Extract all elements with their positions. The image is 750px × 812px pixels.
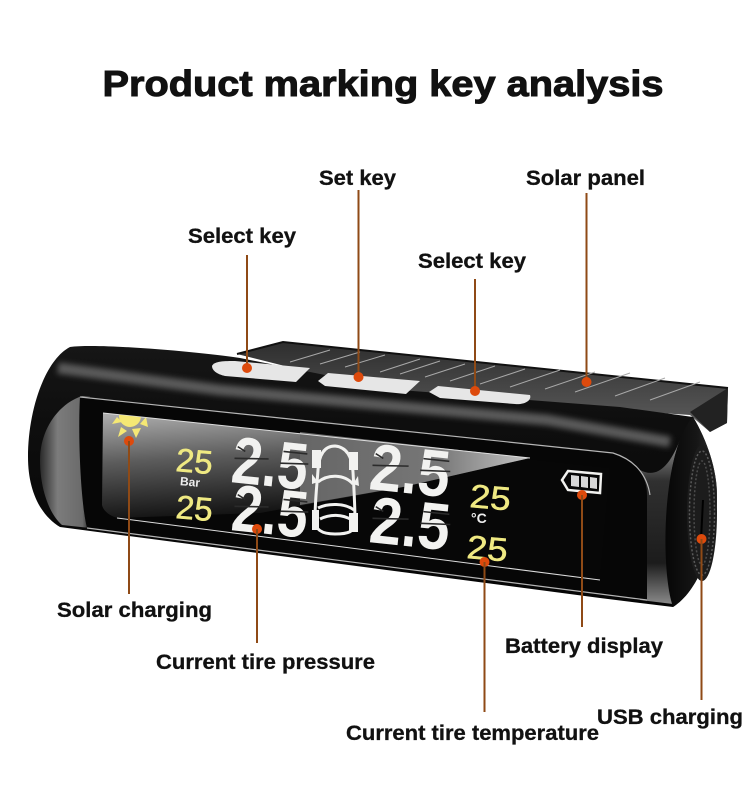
- top-right pressure reading: 2.5: [367, 429, 454, 511]
- callout: current tire pressure: Current tire pressure: [156, 651, 375, 674]
- icon: battery: [562, 471, 601, 493]
- main body: [28, 346, 717, 607]
- callout: select key right: Select key: [418, 250, 526, 273]
- right bezel: [640, 440, 680, 604]
- callout: select key left: [188, 225, 296, 373]
- callout: solar panel: [526, 167, 645, 387]
- title: Product marking key analysis: [102, 63, 664, 104]
- select key left: [212, 361, 310, 382]
- callout: battery display: [505, 490, 663, 658]
- callout: select key right: [418, 250, 526, 396]
- left temperature bottom: 25: [174, 488, 214, 528]
- bottom-right pressure reading: 2.5: [367, 482, 454, 564]
- callout: usb charging: USB charging: [597, 706, 743, 729]
- body highlight: [58, 368, 670, 442]
- solar panel: [237, 342, 728, 432]
- callout: solar charging: Solar charging: [57, 599, 212, 622]
- unit: bar: Bar: [179, 474, 201, 490]
- right temperature top: 25: [468, 477, 512, 518]
- callout: usb charging: [597, 534, 743, 729]
- callout: current tire temperature: [346, 557, 599, 745]
- LCD screen: [102, 413, 610, 580]
- left temperature top: 25: [174, 441, 214, 481]
- unit: celsius: °C: [471, 510, 487, 526]
- callout: select key left: Select key: [188, 225, 296, 248]
- top-left pressure reading: 2.5: [229, 422, 312, 504]
- left cap recess: [40, 396, 90, 528]
- icon: sun: [112, 414, 148, 438]
- callout: current tire temperature: Current tire temperature: [346, 722, 599, 745]
- callout: current tire pressure: [156, 524, 375, 674]
- icon: car: [312, 446, 359, 534]
- right temperature bottom: 25: [465, 528, 509, 569]
- callout: solar panel: Solar panel: [526, 167, 645, 190]
- front window: [79, 397, 647, 600]
- bottom-left pressure reading: 2.5: [229, 470, 312, 552]
- callout: set key: [319, 167, 396, 382]
- callout: solar charging: [57, 436, 212, 622]
- select key right: [429, 386, 530, 404]
- right end cap: [665, 417, 717, 607]
- callout: battery display: Battery display: [505, 635, 663, 658]
- set key: [318, 373, 420, 394]
- device illustration: [28, 342, 728, 607]
- callout: set key: Set key: [319, 167, 396, 190]
